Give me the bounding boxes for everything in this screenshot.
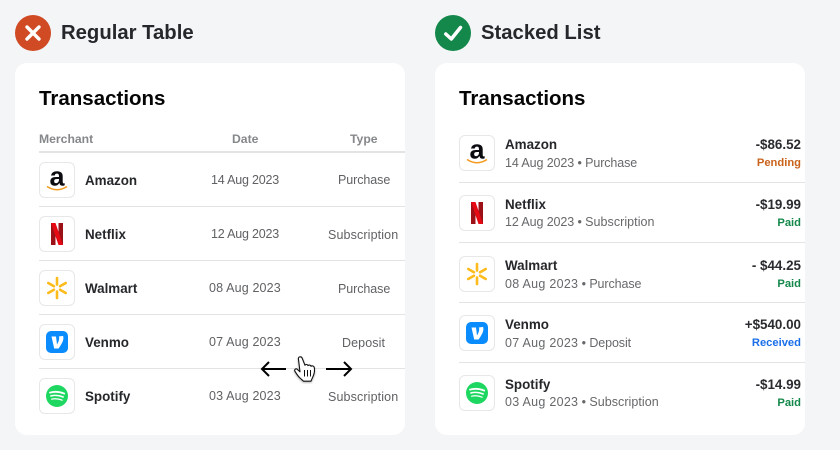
row: Walmart	[39, 270, 390, 306]
arrow: left	[262, 362, 286, 376]
row: Netflix	[39, 216, 398, 252]
column headers	[39, 132, 378, 146]
icon: horizontal scroll hand with arrows	[260, 356, 352, 384]
row: Netflix	[459, 195, 801, 231]
icon: netflix	[459, 195, 495, 231]
row: Netflix: 12 Aug 2023 • Subscription	[505, 215, 655, 229]
panel title: Transactions	[459, 87, 585, 110]
row: Venmo: Deposit	[342, 336, 385, 350]
column headers: Type	[350, 132, 378, 146]
row: Amazon	[459, 135, 801, 171]
row: Walmart: Walmart	[85, 281, 137, 296]
row: Amazon: Amazon	[85, 173, 137, 188]
row: Spotify: Subscription	[328, 390, 398, 404]
row: Venmo: 07 Aug 2023 • Deposit	[505, 336, 631, 350]
heading: regular table	[15, 15, 194, 51]
row: Amazon: Purchase	[338, 173, 390, 187]
icon: venmo	[459, 315, 495, 351]
row: Walmart: Purchase	[338, 282, 390, 296]
row: Amazon: -$86.52	[756, 137, 801, 152]
row: Amazon: Amazon	[505, 137, 557, 152]
row: Amazon: 14 Aug 2023 • Purchase	[505, 156, 637, 170]
row: Walmart	[459, 256, 801, 292]
row: Amazon: Pending	[757, 157, 801, 169]
column headers: Merchant	[39, 132, 93, 146]
icon: netflix	[39, 216, 75, 252]
heading text: Stacked List	[481, 22, 600, 44]
icon: walmart	[459, 256, 495, 292]
row: Spotify	[39, 378, 398, 414]
icon: spotify	[459, 375, 495, 411]
icon: green check	[435, 15, 471, 51]
row: Amazon: 14 Aug 2023	[211, 173, 279, 187]
icon: hand cursor	[295, 357, 314, 381]
row: Walmart: 08 Aug 2023	[209, 281, 281, 295]
icon: red cross	[15, 15, 51, 51]
row: Venmo	[39, 324, 385, 360]
row: Netflix: Netflix	[505, 197, 546, 212]
icon: amazon	[39, 162, 75, 198]
icon: spotify	[39, 378, 75, 414]
row: Venmo: Received	[752, 337, 801, 349]
row: Spotify: Paid	[777, 397, 801, 409]
row: Netflix: Subscription	[328, 228, 398, 242]
column headers: Date	[232, 132, 258, 146]
panel: regular table	[15, 63, 405, 435]
row: Spotify: 03 Aug 2023 • Subscription	[505, 395, 659, 409]
row: Amazon	[39, 162, 390, 198]
panel title: Transactions	[39, 87, 165, 110]
row: Spotify: 03 Aug 2023	[209, 389, 281, 403]
heading text: Regular Table	[61, 22, 194, 44]
row: Netflix: -$19.99	[756, 197, 801, 212]
icon: venmo	[39, 324, 75, 360]
row: Venmo: +$540.00	[745, 317, 801, 332]
icon: walmart	[39, 270, 75, 306]
row: Spotify: Spotify	[505, 377, 550, 392]
row: Venmo: Venmo	[505, 317, 549, 332]
arrow: right	[326, 362, 351, 376]
row: Spotify: -$14.99	[756, 377, 801, 392]
row: Walmart: Walmart	[505, 258, 557, 273]
row: Spotify: Spotify	[85, 389, 130, 404]
row: Venmo	[459, 315, 801, 351]
panel: stacked list	[435, 63, 805, 435]
row: Netflix: Netflix	[85, 227, 126, 242]
row: Walmart: 08 Aug 2023 • Purchase	[505, 277, 641, 291]
heading: stacked list	[435, 15, 600, 51]
row: Spotify	[459, 375, 801, 411]
row: Netflix: 12 Aug 2023	[211, 227, 279, 241]
row: Venmo: 07 Aug 2023	[209, 335, 281, 349]
row: Walmart: Paid	[777, 278, 801, 290]
row: Venmo: Venmo	[85, 335, 129, 350]
row: Netflix: Paid	[777, 217, 801, 229]
icon: amazon: a	[49, 162, 65, 192]
row: Walmart: - $44.25	[752, 258, 801, 273]
icon: amazon: a	[469, 135, 485, 164]
icon: amazon	[459, 135, 495, 171]
